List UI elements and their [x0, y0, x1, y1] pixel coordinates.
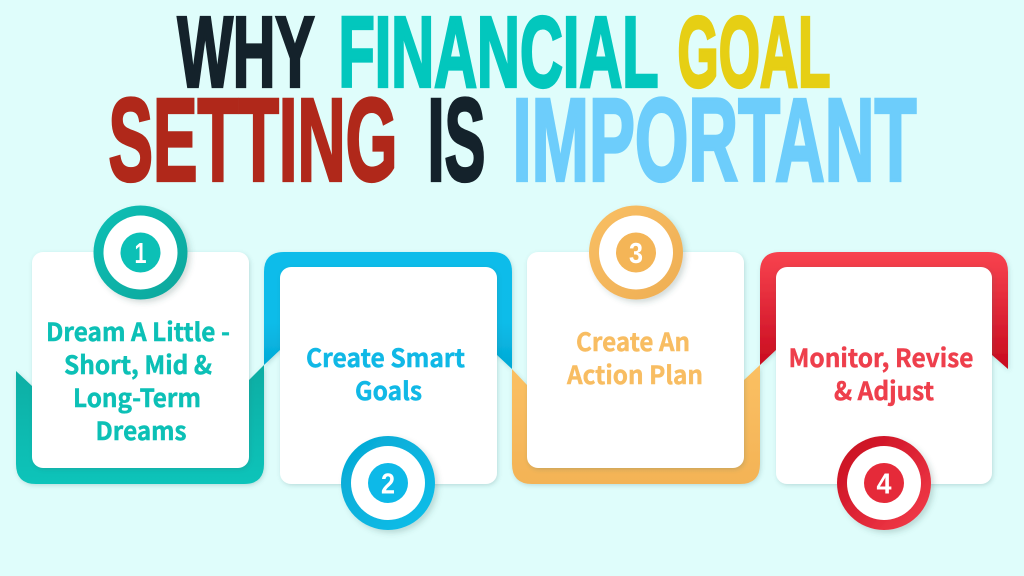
badge 3: 3: [629, 238, 643, 270]
step 3 text: [566, 323, 703, 392]
title line 2: [108, 74, 916, 206]
step 4 text: & Adjust: [834, 372, 934, 408]
step 2 text: Goals: [355, 372, 422, 408]
step 1 text: Dream A Little -: [46, 313, 230, 349]
title line 2: SETTING: [108, 74, 398, 206]
step 1 text: [46, 313, 230, 448]
step 4 text: [788, 339, 974, 408]
badge 4: [837, 436, 931, 530]
step 1 text: Dreams: [96, 412, 186, 448]
badge 4: 4: [876, 468, 892, 500]
badge 1: 1: [134, 238, 146, 270]
step 2 text: Create Smart: [306, 339, 465, 375]
panel: step 1 dream: [16, 206, 264, 484]
title line 2: IS: [428, 74, 486, 206]
title: [108, 0, 916, 206]
badge 2: 2: [381, 468, 395, 500]
badge 2: [341, 436, 435, 530]
badge 3: [589, 206, 683, 300]
step 4 text: Monitor, Revise: [788, 339, 974, 375]
badge 1: [94, 206, 188, 300]
step 2 text: [306, 339, 465, 408]
step 3 text: Action Plan: [566, 356, 703, 392]
panel: step 3 action plan: [512, 206, 760, 484]
panel: step 2 smart goals: [264, 252, 512, 530]
step 1 text: Short, Mid &: [64, 346, 212, 382]
step 1 text: Long-Term: [73, 379, 201, 415]
panel: step 4 monitor: [760, 252, 1008, 530]
step 3 text: Create An: [576, 323, 690, 359]
